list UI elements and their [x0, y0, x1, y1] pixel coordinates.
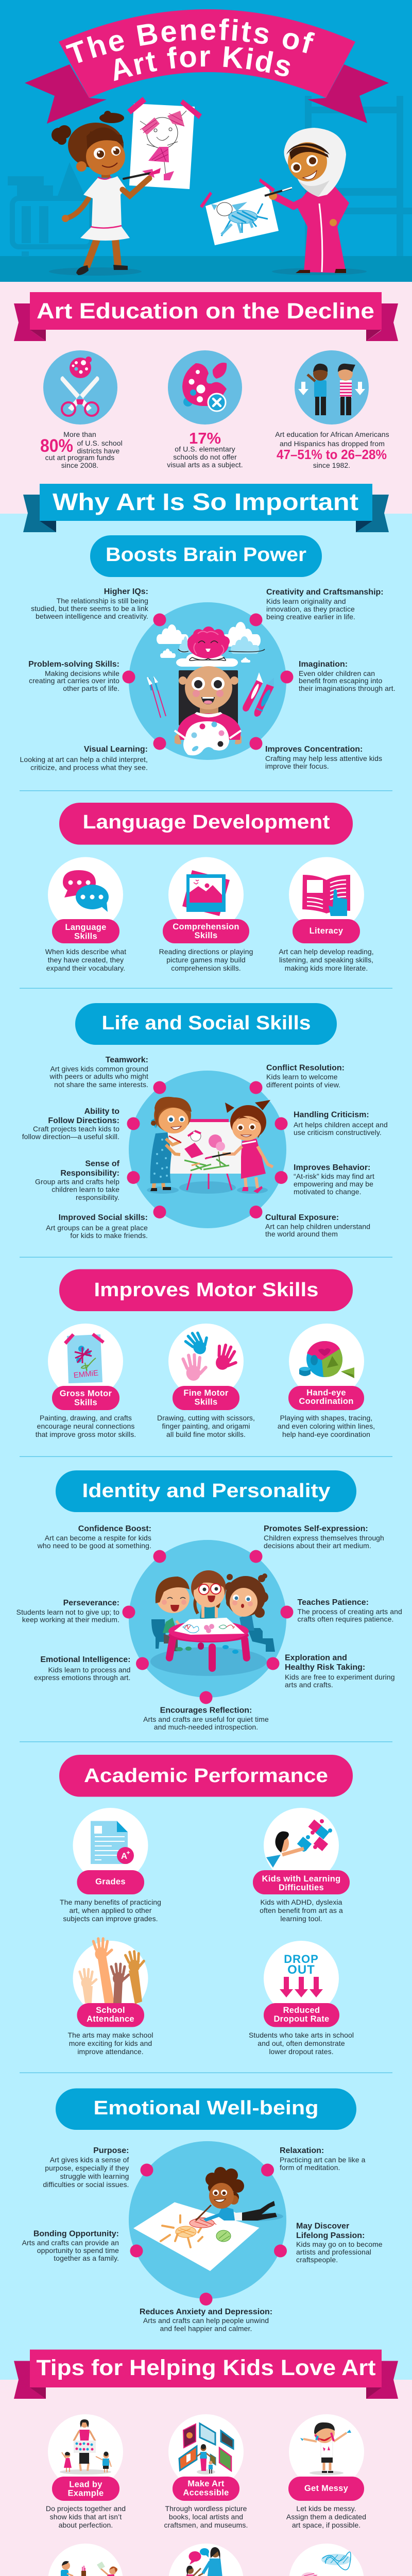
paper: girl drawing: [127, 97, 202, 189]
text: Conflict Resolution: [266, 1063, 345, 1089]
card: Gross Motor Skills: that improve gross motor skills.: [36, 1430, 136, 1438]
text: Teamwork: Art gives kids common ground: [50, 1064, 148, 1073]
section heading: Improves Motor Skills: [59, 1269, 353, 1311]
text: Teamwork: not share the same interests.: [54, 1080, 148, 1089]
card: School Attendance: The arts may make school: [67, 2031, 153, 2039]
stat: 80% of districts: since 2008.: [61, 461, 98, 469]
section heading: Emotional Well-being: Emotional Well-being: [94, 2097, 318, 2119]
stat: 17% of schools: visual arts as a subject.: [167, 461, 243, 469]
text: Imagination: Imagination:: [299, 660, 348, 669]
text: Creativity and Craftsmanship: [266, 588, 384, 621]
card: Comprehension Skills: comprehension skills.: [171, 964, 241, 972]
icon: graded document: A: [121, 1851, 127, 1861]
text: Higher IQs: The relationship is still being: [57, 597, 148, 605]
stat: 17% of schools: 17%: [189, 429, 221, 447]
card: Hand-eye Coordination: [278, 1324, 375, 1438]
marker dots: [127, 1081, 287, 1218]
text: Ability to Follow Directions: [22, 1107, 119, 1141]
card: Get Messy: art space, if possible.: [292, 2521, 360, 2529]
panel: well-being illustration: [129, 2141, 287, 2306]
character: girl with palette: [175, 666, 242, 755]
card: Lead by Example: show kids that art isn’t: [50, 2513, 122, 2521]
section heading: Language Development: Language Development: [82, 811, 330, 833]
text: Improves Concentration: improve their focus.: [265, 762, 329, 770]
card: Fine Motor Skills: finger painting, and origami: [162, 1422, 250, 1430]
character: girl with glasses: [191, 1570, 226, 1622]
text: Exploration and Healthy Risk Taking: Exploration and: [285, 1654, 347, 1662]
stat: 80% of districts: cut art program funds: [45, 453, 114, 462]
text: Sense of Responsibility: children learn to take: [52, 1185, 119, 1193]
card: Gross Motor Skills: Painting, drawing, and crafts: [40, 1414, 132, 1422]
text: Reduces Anxiety and Depression: Arts and crafts can help people unwind: [143, 2316, 269, 2325]
title ribbon: The Benefits of: [65, 19, 315, 63]
text: Sense of Responsibility: [35, 1159, 120, 1201]
clouds: [157, 622, 261, 667]
card: Comprehension Skills: picture games may build: [166, 956, 246, 964]
text: Bonding Opportunity: Arts and crafts can provide an: [22, 2239, 119, 2247]
card: School Attendance: improve attendance.: [77, 2047, 144, 2056]
icon: handprints: [183, 1328, 240, 1381]
character: girl with brush: [49, 111, 161, 276]
icon: meditating brain: [178, 626, 265, 660]
text: Ability to Follow Directions: follow direction—a useful skill.: [22, 1132, 119, 1141]
icon: raised hands: [80, 1939, 145, 2004]
text: Bonding Opportunity: opportunity to spend time: [37, 2246, 119, 2255]
card: Literacy: Literacy: [310, 926, 344, 936]
text: Bonding Opportunity: Bonding Opportunity:: [33, 2230, 119, 2238]
text: Problem-solving Skills: [28, 660, 119, 692]
text: Higher IQs: between intelligence and creativity.: [36, 612, 148, 620]
heading ribbon: Why Art Is So Important: [23, 484, 389, 532]
text: Improved Social skills: [46, 1213, 148, 1240]
text: Confidence Boost: Art can become a respite for kids: [45, 1534, 151, 1542]
panel: identity illustration: [123, 1540, 294, 1704]
card: Literacy: [279, 857, 374, 972]
text: Visual Learning: [20, 745, 148, 772]
stat: 80% of districts: [40, 350, 123, 469]
card: Lead by Example: [46, 2414, 126, 2529]
text: Higher IQs: studied, but there seems to be a link: [31, 604, 149, 613]
text: Teaches Patience: [298, 1598, 402, 1623]
text: Emotional Intelligence: express emotions through art.: [34, 1673, 131, 1682]
text: May Discover Lifelong Passion: Lifelong Passion:: [296, 2231, 365, 2240]
text: Reduces Anxiety and Depression: Reduces Anxiety and Depression:: [140, 2308, 272, 2316]
card: Reduced Dropout Rate: Reduced: [283, 2006, 320, 2015]
card: Comprehension Skills: Skills: [195, 931, 217, 940]
character: curly-hair girl: [222, 1573, 275, 1654]
card: Get Messy: Let kids be messy.: [296, 2504, 356, 2513]
text: Promotes Self-expression: Promotes Self-expression:: [264, 1524, 368, 1533]
card: School Attendance: School: [96, 2006, 125, 2015]
heading ribbon: Art Education on the Decline: [14, 292, 398, 341]
text: Teaches Patience: Teaches Patience:: [298, 1598, 369, 1607]
text: Higher IQs: Higher IQs:: [104, 587, 148, 596]
stat: 80% of districts: of U.S. school: [77, 439, 123, 447]
text: Confidence Boost: Confidence Boost:: [78, 1524, 151, 1533]
character: girl in pink dress: [205, 1100, 273, 1193]
text: Higher IQs: [31, 587, 149, 620]
card: Hand-eye Coordination: Coordination: [299, 1397, 354, 1406]
card: Kids with Learning Difficulties: often benefit from art as a: [260, 1906, 343, 1914]
section heading: Identity and Personality: Identity and Personality: [82, 1480, 331, 1502]
title ribbon: Art for Kids: [114, 46, 290, 81]
icon: open book with hand: [302, 875, 350, 916]
icon: palette with x badge: [182, 363, 227, 411]
card: Grades: art, when applied to other: [69, 1906, 152, 1914]
text: Sense of Responsibility: responsibility.: [76, 1193, 119, 1201]
card: Kids with Learning Difficulties: learning tool.: [280, 1914, 322, 1923]
text: Cultural Exposure: Art can help children understand: [265, 1222, 370, 1230]
card: Literacy: listening, and speaking skills,: [279, 956, 373, 964]
stat: 17% of schools: of U.S. elementary: [175, 445, 235, 453]
character: girl in blue dress: [150, 1097, 192, 1191]
text: Purpose: difficulties or social issues.: [43, 2180, 129, 2189]
card: Do It Their Way: [48, 2544, 123, 2576]
section heading: Identity and Personality: [56, 1470, 356, 1512]
card: Gross Motor Skills: Gross Motor: [60, 1389, 112, 1398]
icon: speech bubbles: [63, 870, 109, 912]
icon: drop out arrows: OUT: [287, 1963, 315, 1977]
text: Sense of Responsibility: Group arts and crafts help: [35, 1178, 119, 1186]
section heading: Boosts Brain Power: Boosts Brain Power: [106, 544, 306, 566]
card: Gross Motor Skills: encourage neural connections: [37, 1422, 134, 1430]
card: Kids with Learning Difficulties: Kids with ADHD, dyslexia: [260, 1898, 342, 1906]
card: Grades: [60, 1808, 161, 1923]
card: Reduced Dropout Rate: Dropout Rate: [273, 2014, 330, 2024]
card: Comprehension Skills: Comprehension: [173, 922, 239, 931]
text: Improves Behavior: “At-risk” kids may find art: [294, 1172, 374, 1180]
text: Ability to Follow Directions: Craft projects teach kids to: [33, 1125, 119, 1133]
text: Purpose: [43, 2146, 129, 2189]
character: girl in hijab: [265, 128, 367, 275]
text: Improves Behavior: [294, 1163, 374, 1196]
text: Reduces Anxiety and Depression: [140, 2308, 272, 2333]
stat: 80% of districts: More than: [63, 430, 96, 438]
stat: 17% of schools: [167, 350, 243, 469]
text: Imagination: benefit from escaping into: [299, 676, 383, 685]
card: School Attendance: more exciting for kids and: [69, 2039, 152, 2047]
text: Perseverance: Perseverance:: [63, 1599, 119, 1607]
card: Gross Motor Skills: [36, 1324, 136, 1438]
card: School Attendance: [67, 1939, 153, 2056]
text: Relaxation: Practicing art can be like a: [280, 2156, 366, 2164]
section heading: Improves Motor Skills: Improves Motor Skills: [94, 1279, 318, 1301]
section heading: Life and Social Skills: [75, 1003, 337, 1045]
text: May Discover Lifelong Passion: craftspeople.: [296, 2256, 338, 2264]
card: Grades: Grades: [95, 1877, 126, 1887]
icon: child with puzzle: [266, 1819, 332, 1868]
card: Kids with Learning Difficulties: Kids with Learning: [262, 1874, 341, 1884]
text: Teaches Patience: crafts often requires patience.: [298, 1615, 393, 1623]
text: Creativity and Craftsmanship: innovation, as they practice: [266, 605, 355, 613]
text: Improved Social skills: for kids to make friends.: [70, 1231, 148, 1240]
text: Sense of Responsibility: Sense of: [85, 1159, 120, 1168]
card: Lead by Example: Lead by: [69, 2480, 102, 2489]
text: Handling Criticism: Handling Criticism:: [294, 1111, 369, 1119]
text: Imagination: [299, 660, 396, 692]
card: Grades: The many benefits of practicing: [60, 1898, 161, 1906]
card: Get Messy: [286, 2414, 366, 2529]
text: Problem-solving Skills: creating art carries over into: [29, 676, 119, 685]
card: Reduced Dropout Rate: and out, often demonstrate: [258, 2039, 345, 2047]
card: Comprehension Skills: Reading directions or playing: [159, 947, 253, 956]
panel: brain power illustration: [123, 602, 294, 760]
section heading: Language Development: [59, 803, 353, 845]
marker dots: [130, 2164, 287, 2306]
text: Purpose: Purpose:: [93, 2146, 129, 2155]
stat: art education dropped: 47–51% to 26–28%: [277, 447, 387, 462]
text: Promotes Self-expression: decisions about their art medium.: [264, 1541, 371, 1550]
text: Creativity and Craftsmanship: Kids learn originality and: [266, 597, 346, 605]
icon: photo: [182, 870, 230, 916]
text: Creativity and Craftsmanship: being creative earlier in life.: [266, 613, 355, 621]
text: Reduces Anxiety and Depression: and feel happier and calmer.: [160, 2325, 252, 2333]
text: Promotes Self-expression: Children express themselves through: [264, 1534, 384, 1542]
text: Emotional Intelligence: Kids learn to process and: [48, 1666, 131, 1674]
text: Cultural Exposure: the world around them: [265, 1230, 338, 1238]
text: Problem-solving Skills: other parts of life.: [63, 684, 119, 692]
card: Talk About Their Art: [158, 2544, 254, 2576]
card: Literacy: making kids more literate.: [285, 964, 368, 972]
heading ribbon: Why Art Is So Important: Why Art Is So Important: [53, 488, 358, 515]
card: Kids with Learning Difficulties: Difficulties: [279, 1883, 324, 1892]
stat: art education dropped: [275, 350, 389, 469]
background room silhouette: [0, 96, 412, 282]
text: Teamwork: Teamwork:: [106, 1056, 148, 1064]
card: Make Art Accessible: craftsmen, and museums.: [164, 2521, 248, 2529]
icon: mother and kids with handprint sheet: [60, 2419, 111, 2475]
icon: mother and child talking: [179, 2547, 236, 2576]
card: Comprehension Skills: [159, 857, 253, 972]
text: Relaxation: Relaxation:: [280, 2146, 324, 2155]
card: Lead by Example: Do projects together and: [46, 2504, 126, 2513]
section heading: Emotional Well-being: [56, 2089, 356, 2130]
text: Encourages Reflection: Arts and crafts are useful for quiet time: [143, 1715, 269, 1723]
card: Make Art Accessible: [164, 2414, 248, 2529]
text: Handling Criticism: [294, 1111, 388, 1137]
text: Improves Concentration: [265, 745, 382, 770]
icon: shape sorter ball: [299, 1341, 354, 1378]
text: Exploration and Healthy Risk Taking: Kids are free to experiment during: [285, 1673, 395, 1681]
text: Visual Learning: Looking at art can help a child interpret,: [20, 755, 148, 764]
character: boy: [151, 1577, 192, 1651]
text: Relaxation: form of meditation.: [280, 2163, 340, 2172]
card: Language Skills: they have created, they: [48, 956, 124, 964]
card: Let It Be: [285, 2544, 368, 2576]
heading ribbon: Tips for Helping Kids Love Art: Tips for Helping Kids Love Art: [36, 2355, 376, 2380]
heading ribbon: Art Education on the Decline: Art Education on the Decline: [37, 299, 374, 324]
card: Language Skills: Language: [65, 923, 107, 932]
text: Improves Concentration: Crafting may help less attentive kids: [265, 754, 382, 762]
text: Creativity and Craftsmanship: Creativity and Craftsmanship:: [266, 588, 384, 597]
card: Make Art Accessible: Accessible: [183, 2488, 229, 2498]
text: Improves Concentration: Improves Concentration:: [265, 745, 363, 754]
title ribbon: [25, 9, 389, 124]
section heading: Boosts Brain Power: [90, 535, 322, 577]
text: Conflict Resolution: Conflict Resolution:: [266, 1063, 345, 1073]
stat: art education dropped: since 1982.: [313, 461, 350, 469]
section heading: Academic Performance: Academic Performance: [84, 1765, 328, 1787]
text: Confidence Boost: [37, 1524, 151, 1550]
card: Make Art Accessible: Through wordless picture: [165, 2504, 247, 2513]
card: Fine Motor Skills: all build fine motor skills.: [166, 1430, 246, 1438]
text: Teamwork: with peers or adults who might: [49, 1072, 148, 1080]
section heading: Academic Performance: [59, 1755, 353, 1797]
card: Kids with Learning Difficulties: [253, 1808, 350, 1923]
text: Encourages Reflection: [143, 1706, 269, 1731]
panel: life skills illustration: [127, 1071, 287, 1228]
text: Promotes Self-expression: [264, 1524, 384, 1550]
text: Ability to Follow Directions: Follow Directions:: [48, 1116, 119, 1125]
card: Reduced Dropout Rate: [249, 1941, 354, 2056]
text: Confidence Boost: who need to be good at something.: [37, 1541, 151, 1550]
text: Improves Behavior: Improves Behavior:: [294, 1163, 370, 1172]
marker dots: [123, 1550, 294, 1704]
text: Improved Social skills: Improved Social skills:: [59, 1213, 148, 1222]
icon: child's flower picture: [64, 1333, 105, 1383]
icon: graded document: +: [126, 1849, 130, 1856]
text: Problem-solving Skills: Making decisions while: [45, 669, 119, 677]
text: Improves Behavior: motivated to change.: [294, 1188, 362, 1196]
card: Fine Motor Skills: Fine Motor: [183, 1388, 229, 1398]
text: Perseverance: Students learn not to give up; to: [16, 1608, 119, 1616]
text: Perseverance: [16, 1599, 119, 1624]
icon: child's flower picture: EMMiE: [73, 1369, 99, 1380]
text: Purpose: Art gives kids a sense of: [50, 2156, 129, 2164]
card: Reduced Dropout Rate: Students who take arts in school: [249, 2031, 354, 2039]
stat: 80% of districts: 80%: [40, 436, 73, 456]
heading ribbon: Tips for Helping Kids Love Art: [14, 2349, 398, 2399]
card: Language Skills: When kids describe what: [45, 947, 126, 956]
card: Lead by Example: about perfection.: [59, 2521, 113, 2529]
text: Purpose: purpose, especially if they: [45, 2164, 129, 2172]
icon: drop out arrows: [280, 1953, 323, 1997]
icon: boy covered in paint: [300, 2422, 351, 2475]
text: Emotional Intelligence: [34, 1655, 131, 1682]
card: Reduced Dropout Rate: lower dropout rates.: [269, 2047, 334, 2056]
stat: 80% of districts: districts have: [77, 447, 119, 455]
icon: paper with scribbles: [133, 2202, 260, 2271]
icon: scissors cutting palette: [61, 357, 99, 416]
card: Language Skills: expand their vocabulary.: [46, 964, 125, 972]
card: Make Art Accessible: books, local artists and: [169, 2513, 243, 2521]
text: May Discover Lifelong Passion: [296, 2222, 383, 2264]
card: Language Skills: [45, 857, 126, 972]
text: Emotional Intelligence: Emotional Intelligence:: [40, 1655, 131, 1664]
card: Gross Motor Skills: Skills: [74, 1398, 97, 1408]
icon: drop out arrows: DROP: [284, 1953, 319, 1965]
card: Fine Motor Skills: [157, 1324, 255, 1438]
card: Hand-eye Coordination: help hand-eye coordination: [282, 1430, 370, 1438]
stat: art education dropped: Art education for African Americans: [275, 430, 389, 438]
text: Cultural Exposure: Cultural Exposure:: [265, 1213, 339, 1222]
text: Problem-solving Skills: Problem-solving Skills:: [28, 660, 119, 669]
card: School Attendance: Attendance: [87, 2014, 134, 2024]
card: Lead by Example: Example: [68, 2488, 104, 2498]
text: Exploration and Healthy Risk Taking: arts and crafts.: [285, 1681, 333, 1689]
card: Literacy: Art can help develop reading,: [279, 947, 374, 956]
card: Hand-eye Coordination: Playing with shapes, tracing,: [280, 1414, 372, 1422]
card: Hand-eye Coordination: and even coloring within lines,: [278, 1422, 375, 1430]
text: Perseverance: keep working at their medium.: [22, 1616, 119, 1624]
card: Make Art Accessible: Make Art: [187, 2479, 225, 2488]
text: May Discover Lifelong Passion: May Discover: [296, 2222, 349, 2231]
stat: 17% of schools: schools do not offer: [173, 453, 237, 461]
card: Language Skills: Skills: [74, 931, 97, 941]
text: Bonding Opportunity: together as a family.: [54, 2254, 119, 2262]
text: Imagination: their imaginations through art.: [299, 684, 396, 692]
marker dots: [123, 613, 294, 750]
character: boy lying down: [196, 2167, 283, 2222]
card: Grades: subjects can improve grades.: [63, 1914, 158, 1923]
text: Teamwork: [49, 1056, 148, 1089]
section heading: Life and Social Skills: Life and Social Skills: [102, 1012, 311, 1034]
text: Cultural Exposure: [265, 1213, 370, 1238]
text: Handling Criticism: use criticism constructively.: [294, 1128, 382, 1137]
text: Bonding Opportunity: [22, 2230, 119, 2262]
text: Sense of Responsibility: Responsibility:: [60, 1169, 119, 1178]
text: May Discover Lifelong Passion: Kids may go on to become: [296, 2240, 383, 2248]
stat: art education dropped: and Hispanics has dropped from: [280, 439, 385, 448]
text: Conflict Resolution: Kids learn to welcome: [266, 1073, 338, 1081]
text: Conflict Resolution: different points of view.: [266, 1081, 340, 1089]
text: Purpose: struggle with learning: [60, 2172, 129, 2180]
text: Imagination: Even older children can: [299, 669, 375, 677]
text: Visual Learning: Visual Learning:: [84, 745, 148, 754]
text: Exploration and Healthy Risk Taking: Healthy Risk Taking:: [285, 1663, 365, 1672]
text: Visual Learning: criticize, and process what they see.: [30, 764, 148, 772]
text: Encourages Reflection: and much-needed introspection.: [154, 1723, 258, 1731]
text: Ability to Follow Directions: Ability to: [84, 1107, 119, 1116]
text: Improved Social skills: Art groups can be a great place: [46, 1224, 148, 1232]
card: Fine Motor Skills: Skills: [195, 1397, 217, 1406]
panel: hero: [0, 0, 412, 282]
icon: kids at table: [55, 2561, 117, 2576]
icon: graded document: [91, 1821, 134, 1864]
text: Teaches Patience: The process of creating arts and: [298, 1607, 402, 1616]
icon: easel with painting: [147, 1119, 268, 1194]
card: Hand-eye Coordination: Hand-eye: [306, 1388, 346, 1397]
paper: cat drawing: [200, 178, 279, 245]
card: Get Messy: Assign them a dedicated: [286, 2513, 366, 2521]
text: Exploration and Healthy Risk Taking: [285, 1654, 395, 1689]
icon: table with paper: [165, 1618, 251, 1672]
icon: two kids with down arrows: [298, 364, 365, 415]
text: Encourages Reflection: Encourages Reflection:: [160, 1706, 252, 1715]
card: Fine Motor Skills: Drawing, cutting with scissors,: [157, 1414, 255, 1422]
icon: gallery wall: [179, 2424, 233, 2475]
icon: brushes and crayons: [147, 672, 274, 718]
text: May Discover Lifelong Passion: artists and professional: [296, 2248, 371, 2256]
card: Get Messy: Get Messy: [304, 2484, 349, 2493]
text: Relaxation: [280, 2146, 366, 2172]
icon: kid's scribble: [301, 2552, 351, 2576]
text: Handling Criticism: Art helps children accept and: [294, 1121, 388, 1129]
text: Improves Behavior: empowering and may be: [294, 1180, 373, 1188]
